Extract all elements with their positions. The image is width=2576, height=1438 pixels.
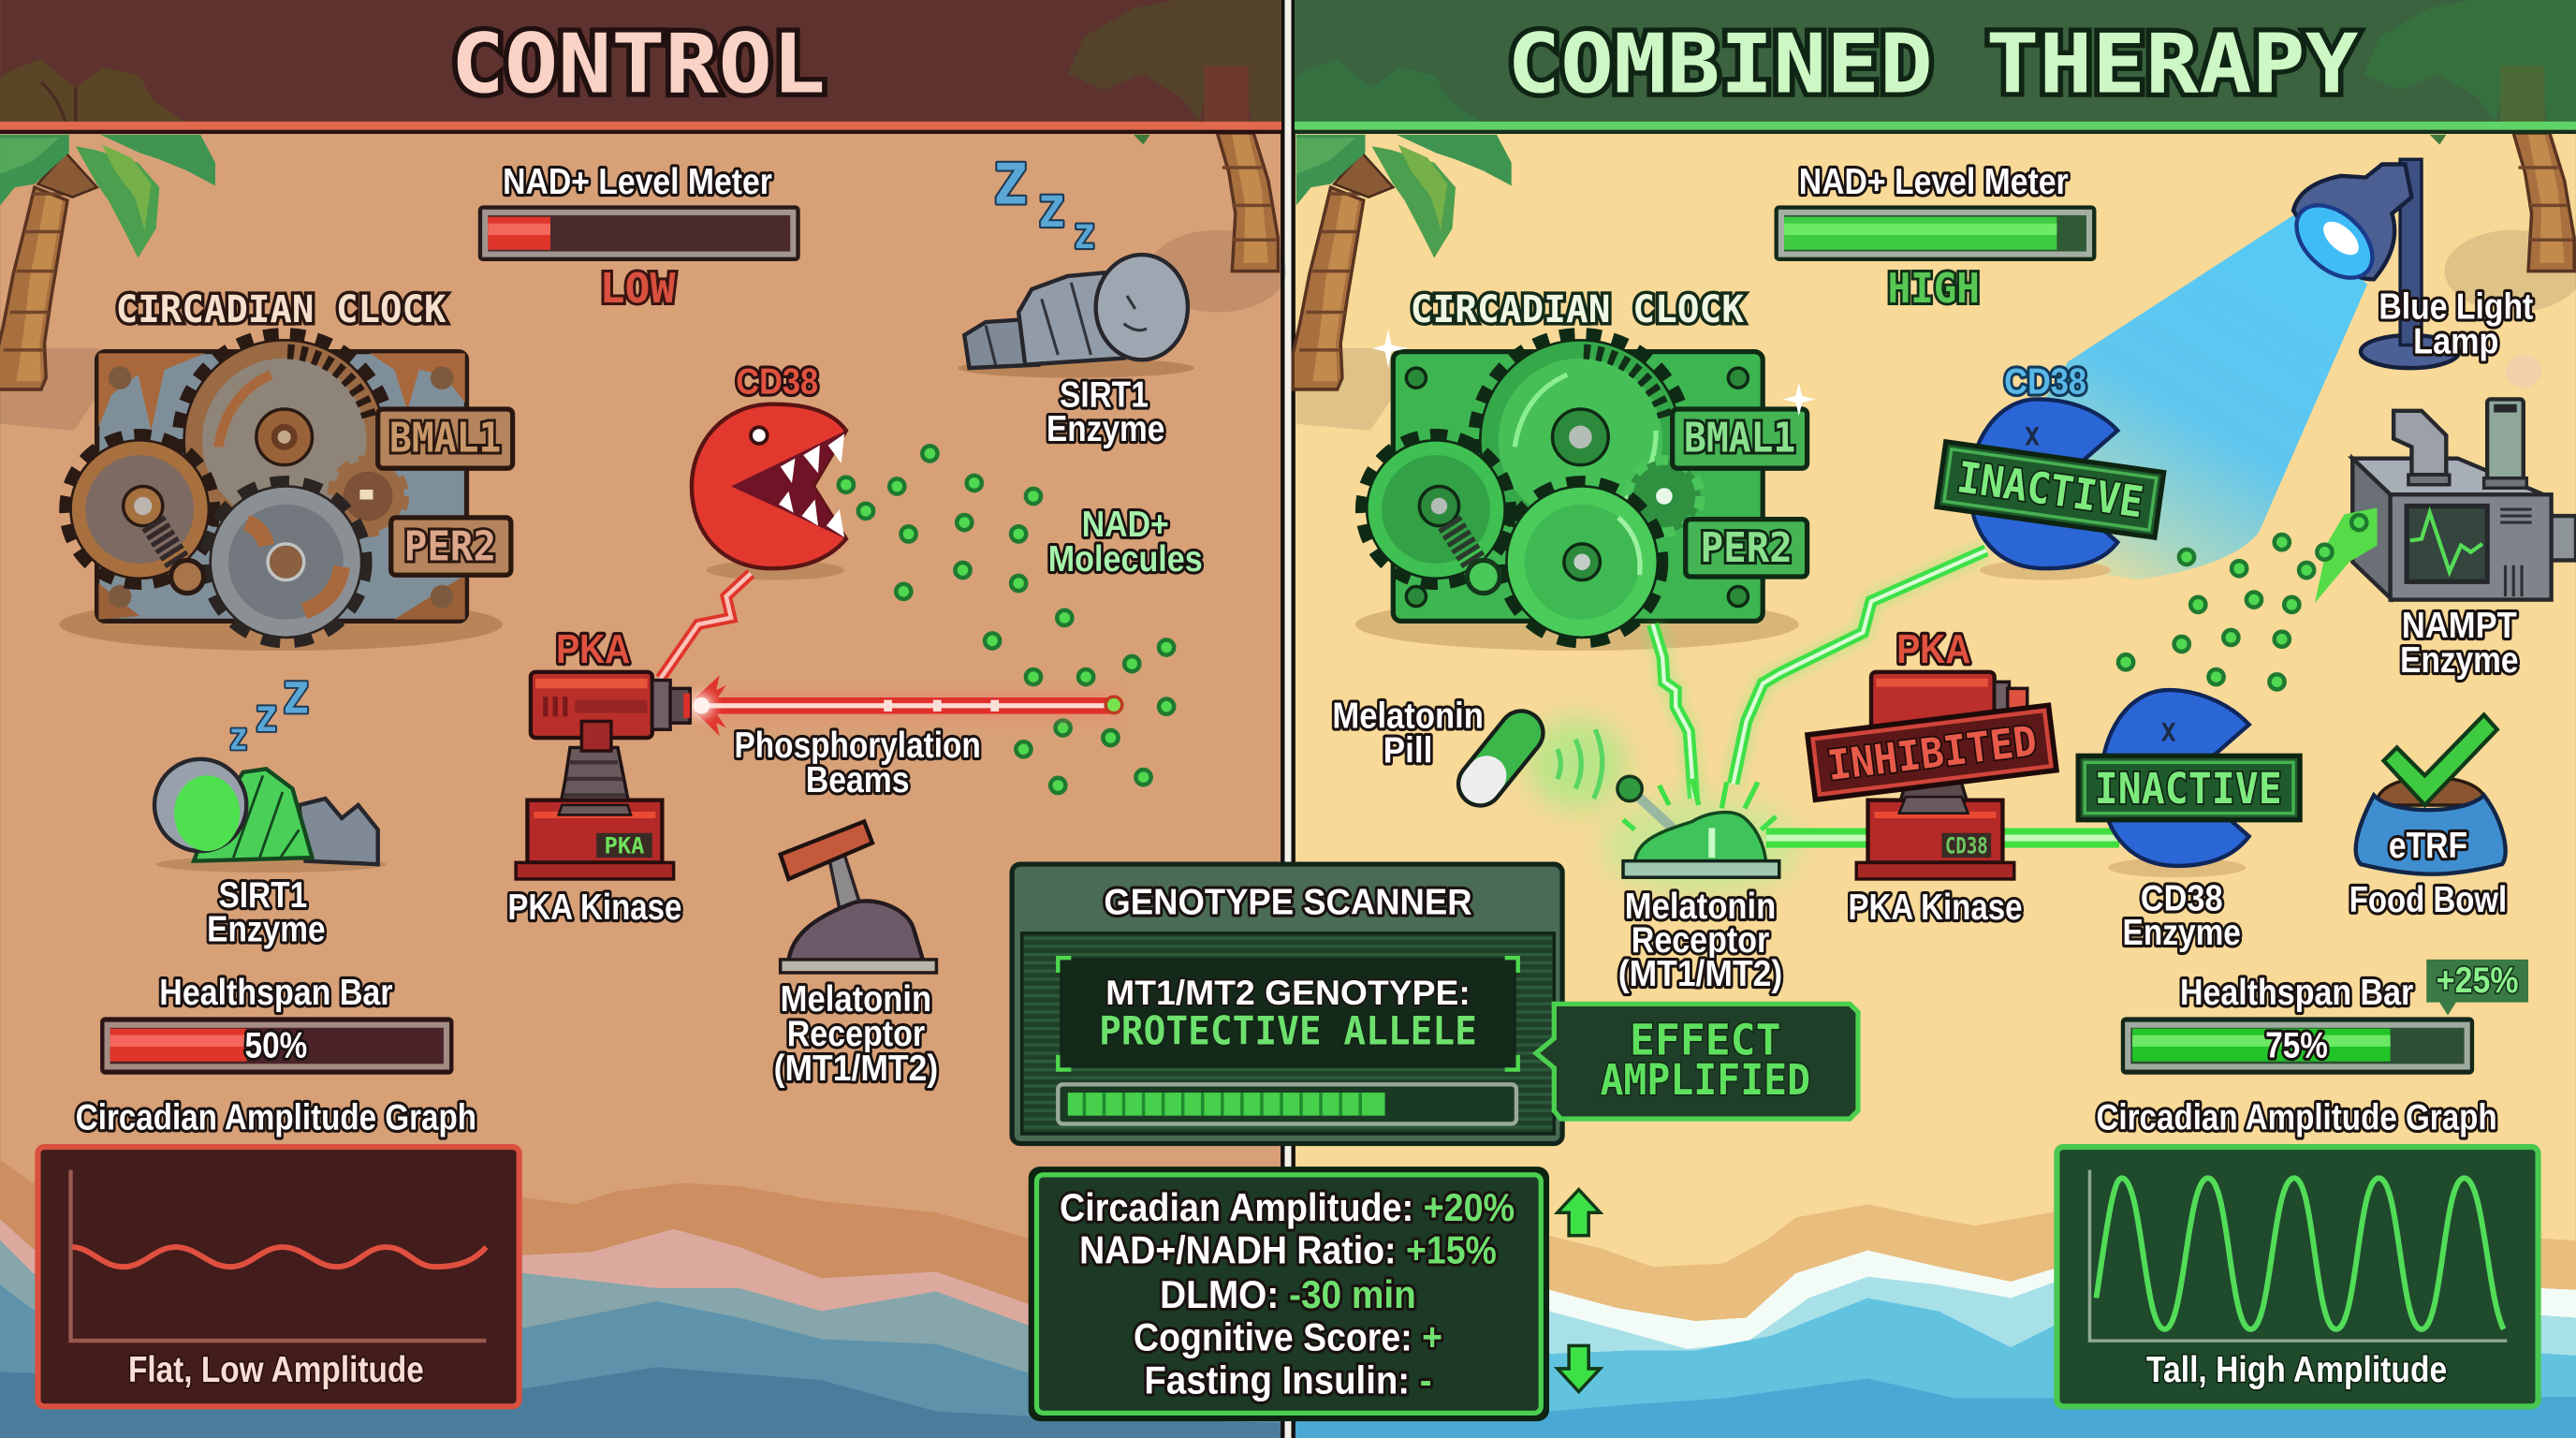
base [527, 800, 662, 862]
gear: big [181, 337, 388, 544]
title: control: CONTROL [451, 16, 826, 111]
low wave [72, 1247, 487, 1267]
tag: BMAL1: BMAL1 [1684, 415, 1795, 462]
label: NAMPT [2402, 606, 2517, 646]
caption: Tall, High Amplitude [2146, 1350, 2447, 1390]
front face [2391, 494, 2552, 600]
label: CD38 [736, 361, 818, 402]
tag: PER2 [1686, 520, 1808, 577]
label: (MT1/MT2) [1618, 954, 1782, 994]
corner brackets [1058, 958, 1518, 1070]
zzz: Z [256, 699, 276, 740]
header: control [0, 0, 1281, 134]
tag: PER2: PER2 [1701, 524, 1793, 572]
label: SIRT1 [218, 875, 307, 916]
shadow [1355, 598, 1799, 651]
label: Melatonin [781, 979, 931, 1020]
label: phosphorylation beams: Beams [806, 760, 909, 800]
caption: Flat, Low Amplitude [128, 1350, 424, 1390]
plate [1393, 352, 1763, 621]
label: (MT1/MT2) [774, 1049, 938, 1089]
left pipe [2393, 411, 2446, 475]
label: Enzyme [2400, 640, 2519, 681]
title: therapy: COMBINED THERAPY [1507, 16, 2359, 111]
screen [1022, 933, 1554, 1134]
stat: insulin: Fasting Insulin: - [1144, 1357, 1432, 1401]
label [1046, 374, 1164, 449]
sleeping SIRT1 robot: control bottom [154, 674, 386, 950]
zzz: Z [1039, 187, 1064, 237]
stem [559, 748, 631, 814]
vents [2500, 509, 2532, 596]
tag: PER2: PER2 [404, 522, 496, 570]
gear: bottom [1505, 485, 1660, 639]
top face [2352, 459, 2552, 498]
label: Melatonin [1625, 887, 1776, 927]
label: CD38 [2004, 361, 2086, 402]
tag: CD38 [1945, 833, 1988, 859]
zzz [230, 674, 309, 756]
CD38 inactive bottom: therapy [2078, 690, 2300, 953]
bowl label: eTRF [2389, 826, 2467, 866]
bar [1774, 205, 2096, 261]
chain [153, 522, 184, 572]
label: phosphorylation beams: Phosphorylation [735, 726, 981, 766]
melatonin receptor lever: therapy [1602, 776, 1799, 994]
circadian clock: control [59, 287, 513, 651]
status: high: HIGH [1888, 265, 1980, 313]
callout: effect amplified [1536, 1004, 1858, 1119]
blue light lamp [2283, 159, 2533, 368]
sleeping SIRT1 robot: control top [958, 154, 1194, 449]
label: Healthspan Bar [159, 973, 393, 1013]
heading: Circadian Amplitude Graph [76, 1098, 476, 1138]
chain [1449, 522, 1480, 572]
label: NAD+ Level Meter [1799, 162, 2069, 202]
banner: INHIBITED [1825, 717, 2040, 790]
label [1618, 887, 1782, 994]
stat: NAD ratio: NAD+/NADH Ratio: +15% [1079, 1228, 1497, 1272]
phosphorylation beam [690, 675, 1122, 736]
label: phosphorylation beams [735, 726, 981, 800]
NAMPT machine [2315, 399, 2576, 681]
plate [97, 352, 466, 621]
zzz: Z [283, 674, 309, 724]
gear: big [1477, 337, 1684, 544]
right stack [2487, 399, 2524, 481]
heading: Circadian Amplitude Graph [2096, 1098, 2497, 1138]
panel: control background [0, 0, 1281, 1438]
label: Healthspan Bar [2180, 973, 2413, 1013]
emission [2315, 507, 2378, 603]
arrow: up [1558, 1190, 1600, 1236]
value: 50% [245, 1025, 307, 1065]
stat: amplitude: Circadian Amplitude: +20% [1060, 1185, 1515, 1229]
barrel [1871, 672, 1995, 734]
base [2361, 335, 2459, 368]
axes [2089, 1170, 2507, 1341]
name: PKA Kinase [1848, 888, 2022, 928]
banner: INACTIVE [2095, 764, 2282, 814]
zzz: Z [1075, 218, 1094, 257]
callout: effect amplified: AMPLIFIED [1600, 1055, 1810, 1105]
amplitude graph: therapy [2056, 1098, 2539, 1406]
CD38 inactive top: therapy [1937, 361, 2164, 580]
melatonin pill [1332, 696, 1627, 810]
label: SIRT1 [1060, 374, 1149, 415]
barrel [531, 672, 652, 738]
NAD meter: control [478, 162, 800, 313]
shadow [59, 598, 503, 651]
heading: GENOTYPE SCANNER [1104, 883, 1472, 923]
healthspan bar: therapy [2121, 960, 2528, 1075]
label: Lamp [2413, 321, 2498, 361]
melatonin receptor lever: control [774, 822, 938, 1089]
name: PKA Kinase [507, 888, 681, 928]
pulse [2410, 513, 2482, 572]
label: Enzyme [2123, 913, 2241, 953]
panel: therapy background [1295, 0, 2576, 1438]
zzz [993, 154, 1094, 257]
CD38 chomper: control [692, 361, 846, 580]
label [207, 875, 326, 950]
gear: pinion [1467, 560, 1500, 594]
high wave [2096, 1178, 2504, 1329]
value: 75% [2265, 1025, 2328, 1065]
label: Enzyme [1046, 409, 1164, 449]
arrow: down [1558, 1345, 1600, 1392]
body [1969, 399, 2117, 568]
bar [478, 205, 800, 261]
label: Receptor [787, 1014, 925, 1054]
waves [1558, 729, 1603, 799]
eTRF food bowl [2349, 714, 2507, 920]
gear: small right [332, 460, 404, 533]
pebble [2505, 355, 2541, 388]
label [2123, 878, 2241, 953]
gear: bottom [209, 485, 363, 639]
heading: CIRCADIAN CLOCK [1411, 287, 1745, 331]
stem [1899, 772, 1969, 805]
label: CD38 [2141, 878, 2223, 918]
pole [2400, 159, 2422, 345]
label: Molecules [1048, 539, 1203, 580]
label [2378, 286, 2533, 361]
tag: BMAL1: BMAL1 [389, 415, 501, 462]
center divider [1281, 0, 1295, 1438]
lightning: receptor signals [1653, 550, 1986, 799]
green inhibition beam [1766, 829, 2119, 848]
check mark [2384, 714, 2497, 805]
sparkles [1372, 329, 1815, 416]
status: low: LOW [600, 265, 676, 313]
body [692, 404, 846, 568]
gear: left [67, 437, 212, 581]
bulb [2283, 191, 2386, 292]
tag: PER2 [391, 518, 511, 575]
teeth [779, 433, 844, 537]
label: Receptor [1632, 920, 1769, 961]
left face [2352, 459, 2391, 598]
genotype scanner panel [1012, 864, 1562, 1143]
palms: control [0, 133, 1286, 431]
NAD meter: therapy [1774, 162, 2096, 313]
stats panel [1032, 1170, 1546, 1418]
name: Food Bowl [2349, 880, 2507, 920]
frame [2056, 1147, 2539, 1406]
PKA turret: therapy [1808, 626, 2056, 928]
frame [37, 1147, 520, 1406]
closed eye: X [2025, 424, 2040, 452]
circadian clock: therapy [1355, 287, 1815, 651]
banner: INACTIVE [1954, 452, 2146, 527]
header: therapy [1295, 0, 2576, 134]
callout +25% [2426, 960, 2528, 1016]
tag: PKA [605, 833, 644, 859]
gear: small right [1628, 460, 1701, 533]
gear: left [1364, 437, 1508, 581]
label [774, 979, 938, 1089]
palms: therapy [1293, 133, 2576, 431]
zzz: Z [230, 724, 247, 756]
screen [2407, 506, 2487, 581]
NAD+ molecules: therapy [2118, 535, 2314, 689]
label: NAD+ [1082, 505, 1169, 545]
label [1048, 505, 1203, 580]
label: Blue Light [2378, 286, 2533, 327]
callout: effect amplified: EFFECT [1630, 1016, 1781, 1065]
lightning: PKA to CD38 [661, 574, 751, 679]
NAD+ molecules: control [839, 446, 1203, 793]
label: Enzyme [207, 910, 326, 950]
mouth [731, 431, 846, 539]
blue light beam [2037, 215, 2367, 580]
stat: DLMO: DLMO: -30 min [1160, 1272, 1416, 1316]
genotype line: MT1/MT2 GENOTYPE: [1105, 974, 1471, 1012]
callout +25%: +25% [2437, 961, 2519, 1001]
allele line: PROTECTIVE ALLELE [1099, 1007, 1477, 1053]
stat: cognitive: Cognitive Score: + [1134, 1315, 1442, 1359]
amplitude graph: control [37, 1098, 520, 1406]
capsule [1480, 733, 1521, 784]
progress bar [1058, 1084, 1516, 1123]
zzz: Z [993, 154, 1027, 218]
label: PKA [556, 626, 630, 672]
label: PKA [1896, 626, 1970, 672]
label: Pill [1383, 730, 1432, 770]
heading: CIRCADIAN CLOCK [116, 287, 446, 331]
label: NAD+ Level Meter [503, 162, 772, 202]
gear: pinion [171, 560, 204, 594]
healthspan bar: control [100, 973, 453, 1075]
axes [71, 1170, 487, 1341]
label [1332, 696, 1484, 770]
eye [751, 427, 768, 444]
PKA turret: control [507, 626, 690, 928]
shade [2293, 165, 2411, 279]
label: Melatonin [1332, 696, 1484, 736]
base [1868, 800, 2002, 862]
label [2400, 606, 2519, 681]
side pipe [2548, 516, 2576, 560]
CD38 inactive bottom: therapy: X [2161, 720, 2176, 748]
